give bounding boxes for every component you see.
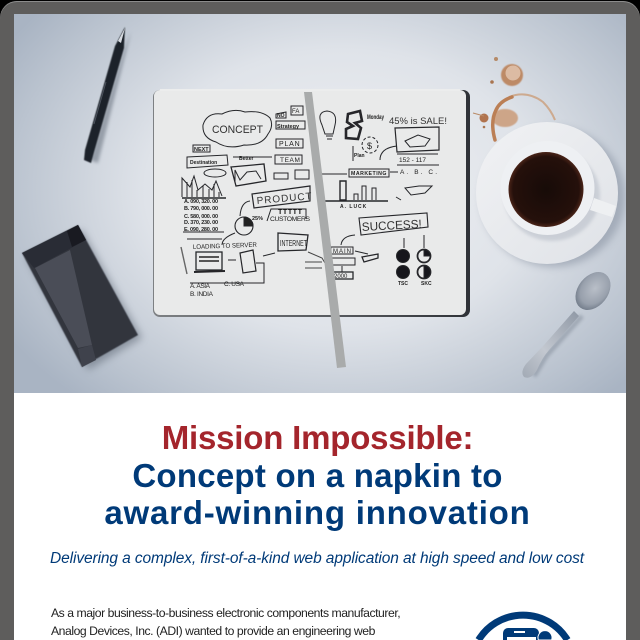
sketch: bulb, dollar and sale box: $ (367, 141, 372, 151)
sketch: concept cloud (203, 110, 272, 147)
bookmark ribbon (304, 92, 346, 368)
sketch: middle left flow boxes: FA (292, 109, 299, 115)
title: Concept on a napkin to (132, 457, 503, 494)
title: award-winning innovation (104, 494, 531, 531)
sketch: bulb, dollar and sale box: 152 - 117 (399, 157, 426, 164)
sketch: left column chart and figures (182, 145, 228, 239)
sketch: four small pie circles (396, 250, 432, 287)
sketch: laptop and server: A. ASIA (190, 283, 211, 290)
sketch: concept cloud: CONCEPT (212, 124, 263, 136)
sketch: customers and internet box: CUSTOMERS (270, 216, 310, 223)
icon: pen (84, 27, 131, 163)
sketch: laptop and server (181, 242, 275, 298)
sketch: left column chart and figures: Destination (190, 160, 217, 166)
hero photo: desk with notebook, pen, phone, coffee and spoon (14, 14, 626, 393)
sketch: middle left flow boxes (231, 106, 309, 186)
sketch: left column chart and figures: B. 790, 000. 00 (184, 206, 218, 212)
sketch: main boxes: 2000 (334, 274, 348, 280)
sketch: middle left flow boxes: NO (277, 113, 285, 119)
sketch: bulb, dollar and sale box: A. B. C. (400, 169, 437, 176)
sketch: bulb, dollar and sale box: Monday (367, 115, 384, 121)
sketch: marketing and bar chart: A. LUCK (340, 204, 367, 210)
sketch: customers and internet box: TTTTT (278, 209, 303, 216)
body text (51, 606, 400, 638)
icon: spoon (522, 265, 618, 378)
sketch: bulb, dollar and sale box (320, 111, 447, 176)
sketch: middle left flow boxes: TEAM (280, 157, 300, 164)
sketch: bulb, dollar and sale box: Plan (354, 153, 365, 159)
sketch: product banner: PRODUCT (256, 191, 312, 207)
icon: coffee stains (473, 57, 555, 140)
sketch: left column chart and figures: A. 090, 320. 00 (184, 199, 218, 205)
sketch: success banner (341, 213, 428, 248)
sketch: middle left flow boxes: Better (239, 156, 254, 162)
icon: smartphone (22, 225, 142, 370)
sketch: middle left flow boxes: PLAN (279, 141, 300, 148)
sketch: marketing and bar chart: MARKETING (351, 171, 387, 177)
sketch: success banner: SUCCESS! (361, 217, 422, 234)
sketch: laptop and server: C. USA (224, 281, 245, 288)
sketch: left column chart and figures: C. 580, 000. 00 (184, 214, 218, 220)
sketch: laptop and server: LOADING TO SERVER (193, 242, 257, 251)
body text: Analog Devices, Inc. (ADI) wanted to provide an engineering web (51, 624, 375, 638)
sketch: product banner (252, 186, 312, 208)
sketch: marketing and bar chart (320, 169, 432, 210)
sketch: left column chart and figures: E. 090, 280. 00 (184, 227, 218, 233)
title (104, 419, 531, 531)
sketch: pie chart (222, 201, 263, 245)
sketch: left column chart and figures: D. 370, 230. 00 (184, 220, 218, 226)
sketch: four small pie circles: SKC (421, 281, 432, 287)
sketch: customers and internet box (267, 209, 310, 251)
notebook (153, 89, 470, 317)
sketch: middle left flow boxes: Strategy (277, 124, 300, 130)
icon: coffee cup and saucer (476, 122, 625, 267)
sketch: bulb, dollar and sale box: 45% is SALE! (389, 116, 447, 127)
icon: mobile device in circle (476, 612, 570, 640)
subtitle: Delivering a complex, first-of-a-kind web application at high speed and low cost (50, 550, 584, 567)
sketch: laptop and server: B. INDIA (190, 291, 214, 298)
sketch: main boxes (305, 247, 378, 280)
sketch: four small pie circles: TSC (398, 281, 408, 287)
title: Mission Impossible: (162, 419, 473, 456)
body text: As a major business-to-business electronic components manufacturer, (51, 606, 400, 620)
sketch: left column chart and figures: NEXT (194, 147, 209, 153)
sketch: main boxes: MAIN (333, 249, 352, 255)
sketch: pie chart: 25% (252, 216, 263, 222)
sketch: business plan doodles (181, 106, 447, 298)
sketch: customers and internet box: INTERNET (280, 238, 307, 248)
